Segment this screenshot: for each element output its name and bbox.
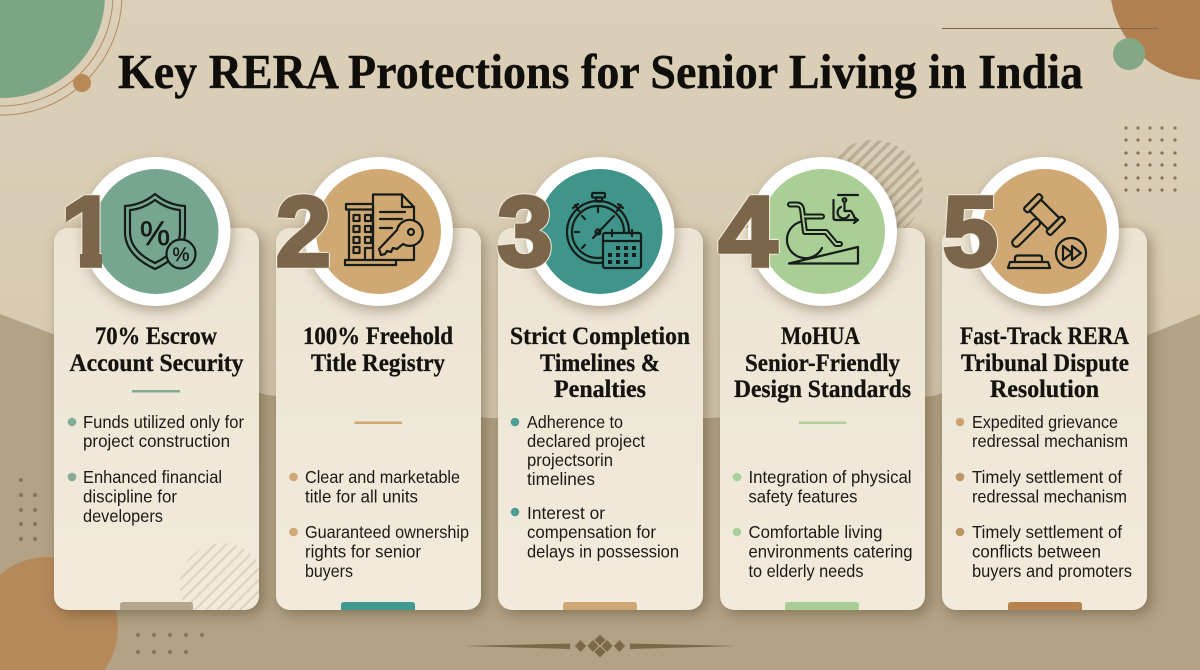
card 2 bullets: Clear and marketable bbox=[305, 467, 460, 487]
card 2 number: 2 bbox=[276, 176, 331, 288]
card 5 number: 5 bbox=[942, 176, 998, 288]
card 4 background bbox=[720, 228, 925, 610]
card 5 bullets: buyers and promoters bbox=[972, 561, 1132, 581]
decoration: top-right dot grid bbox=[1124, 126, 1177, 192]
card 3 background bbox=[498, 228, 703, 610]
card 5 heading bbox=[960, 323, 1129, 403]
card 1 number: 1 bbox=[61, 176, 116, 288]
card 1 bullets: project construction bbox=[83, 431, 230, 451]
card 3 heading bbox=[510, 323, 690, 403]
card 5 heading: Fast-Track RERA bbox=[960, 323, 1129, 350]
decoration: top-right brown circle, line and green dot bbox=[942, 0, 1200, 80]
card 4 heading bbox=[734, 323, 911, 403]
card 1 heading bbox=[70, 323, 244, 377]
card 5 number: 5 bbox=[942, 176, 998, 288]
card 2 bullets: title for all units bbox=[305, 486, 418, 506]
card 5 heading: Tribunal Dispute bbox=[961, 350, 1129, 377]
card 2 background bbox=[276, 228, 481, 610]
decoration: top-left green circle with rings bbox=[0, 0, 122, 115]
icon: shield with percent bbox=[125, 194, 196, 269]
card 4 divider bbox=[799, 422, 846, 424]
card 2 heading bbox=[303, 323, 453, 377]
panel: card 1 escrow bbox=[54, 157, 264, 627]
card 4 bullets: to elderly needs bbox=[748, 561, 864, 581]
icon: wheelchair on ramp bbox=[787, 195, 858, 264]
card 3 bullets bbox=[511, 412, 679, 562]
card 5 bullets: redressal mechanism bbox=[972, 431, 1128, 451]
card 3 bottom tab bbox=[563, 602, 637, 610]
card 4 bullets: Integration of physical bbox=[748, 467, 912, 487]
card 4 number: 4 bbox=[718, 176, 778, 288]
card 3 heading: Penalties bbox=[554, 376, 646, 403]
card 5 bottom tab bbox=[1008, 602, 1082, 610]
card 1 icon circle bbox=[82, 157, 230, 306]
card 4 icon circle bbox=[748, 157, 897, 306]
card 3 bullets: compensation for bbox=[527, 522, 656, 542]
decoration: bottom dot rows bbox=[136, 633, 204, 654]
card 3 bullets: timelines bbox=[527, 469, 595, 489]
title: Key RERA Protections for Senior Living in India bbox=[118, 44, 1083, 99]
card 2 bottom tab bbox=[341, 602, 415, 610]
decoration: left dot column bbox=[19, 478, 37, 541]
card 3 heading: Timelines & bbox=[540, 350, 660, 377]
icon: stopwatch and calendar bbox=[567, 193, 641, 268]
card 5 bullets bbox=[956, 412, 1132, 581]
card 1 heading: Account Security bbox=[70, 350, 244, 377]
card 4 bullets bbox=[733, 467, 912, 581]
card 2 heading: Title Registry bbox=[311, 350, 445, 377]
card 3 bullets: Adherence to bbox=[527, 412, 623, 432]
icon: building, document and key bbox=[345, 194, 423, 265]
icon: gavel with fast forward bbox=[1000, 193, 1086, 268]
card 5 bullets: redressal mechanism bbox=[972, 486, 1127, 506]
card 2 bullets: rights for senior bbox=[305, 542, 421, 562]
card 1 bullets: Enhanced financial bbox=[83, 467, 222, 487]
card 2 bullets: buyers bbox=[305, 561, 353, 581]
card 3 number: 3 bbox=[497, 176, 553, 288]
card 1 heading: 70% Escrow bbox=[95, 323, 217, 350]
card 1 bullets bbox=[68, 412, 244, 526]
card 1 divider bbox=[132, 390, 180, 392]
card 1 bullets: Funds utilized only for bbox=[83, 412, 244, 432]
card 1 bottom tab bbox=[120, 602, 193, 610]
decoration: bottom-left brown circle bbox=[0, 557, 118, 670]
card 1 bullets: discipline for bbox=[83, 486, 177, 506]
card 2 heading: 100% Freehold bbox=[303, 323, 453, 350]
card 5 bullets: conflicts between bbox=[972, 542, 1101, 562]
card 2 number: 2 bbox=[276, 176, 331, 288]
panel: card 3 timelines bbox=[497, 157, 703, 610]
card 5 icon circle bbox=[970, 157, 1119, 306]
card 3 bullets: declared project bbox=[527, 431, 645, 451]
card 3 number: 3 bbox=[497, 176, 553, 288]
card 5 bullets: Expedited grievance bbox=[972, 412, 1118, 432]
card 1 number: 1 bbox=[61, 176, 116, 288]
card 4 heading: MoHUA bbox=[781, 323, 860, 350]
bottom ornament divider bbox=[463, 634, 737, 658]
card 4 bullets: safety features bbox=[748, 486, 858, 506]
card 1 bullets: developers bbox=[83, 506, 163, 526]
card 1 background bbox=[54, 228, 259, 610]
card 1 hatch corner bbox=[180, 543, 259, 610]
icon: shield with percent: % bbox=[140, 215, 170, 253]
card 3 icon circle bbox=[526, 157, 674, 306]
decoration: hatched circle behind card 4 bbox=[823, 140, 923, 240]
panel: card 5 tribunal bbox=[942, 157, 1147, 610]
card 5 heading: Resolution bbox=[990, 376, 1099, 403]
card 5 bullets: Timely settlement of bbox=[972, 522, 1122, 542]
card 3 bullets: delays in possession bbox=[527, 542, 679, 562]
panel: card 2 freehold bbox=[276, 157, 481, 610]
card 4 bullets: environments catering bbox=[748, 542, 912, 562]
card 2 icon circle bbox=[304, 157, 453, 306]
card 2 bullets bbox=[289, 467, 469, 581]
card 2 bullets: Guaranteed ownership bbox=[305, 522, 469, 542]
card 4 number: 4 bbox=[718, 176, 778, 288]
card 3 bullets: Interest or bbox=[527, 503, 605, 523]
card 4 bottom tab bbox=[785, 602, 859, 610]
card 4 bullets: Comfortable living bbox=[748, 522, 882, 542]
card 2 divider bbox=[354, 422, 402, 424]
card 4 heading: Senior-Friendly bbox=[745, 350, 900, 377]
card 4 heading: Design Standards bbox=[734, 376, 911, 403]
card 3 heading: Strict Completion bbox=[510, 323, 690, 350]
panel: card 4 design standards bbox=[718, 157, 925, 610]
card 3 bullets: projectsorin bbox=[527, 450, 613, 470]
icon: shield with percent: % bbox=[173, 245, 190, 266]
card 5 bullets: Timely settlement of bbox=[972, 467, 1122, 487]
card 5 background bbox=[942, 228, 1147, 610]
card 1 number bbox=[64, 194, 102, 269]
